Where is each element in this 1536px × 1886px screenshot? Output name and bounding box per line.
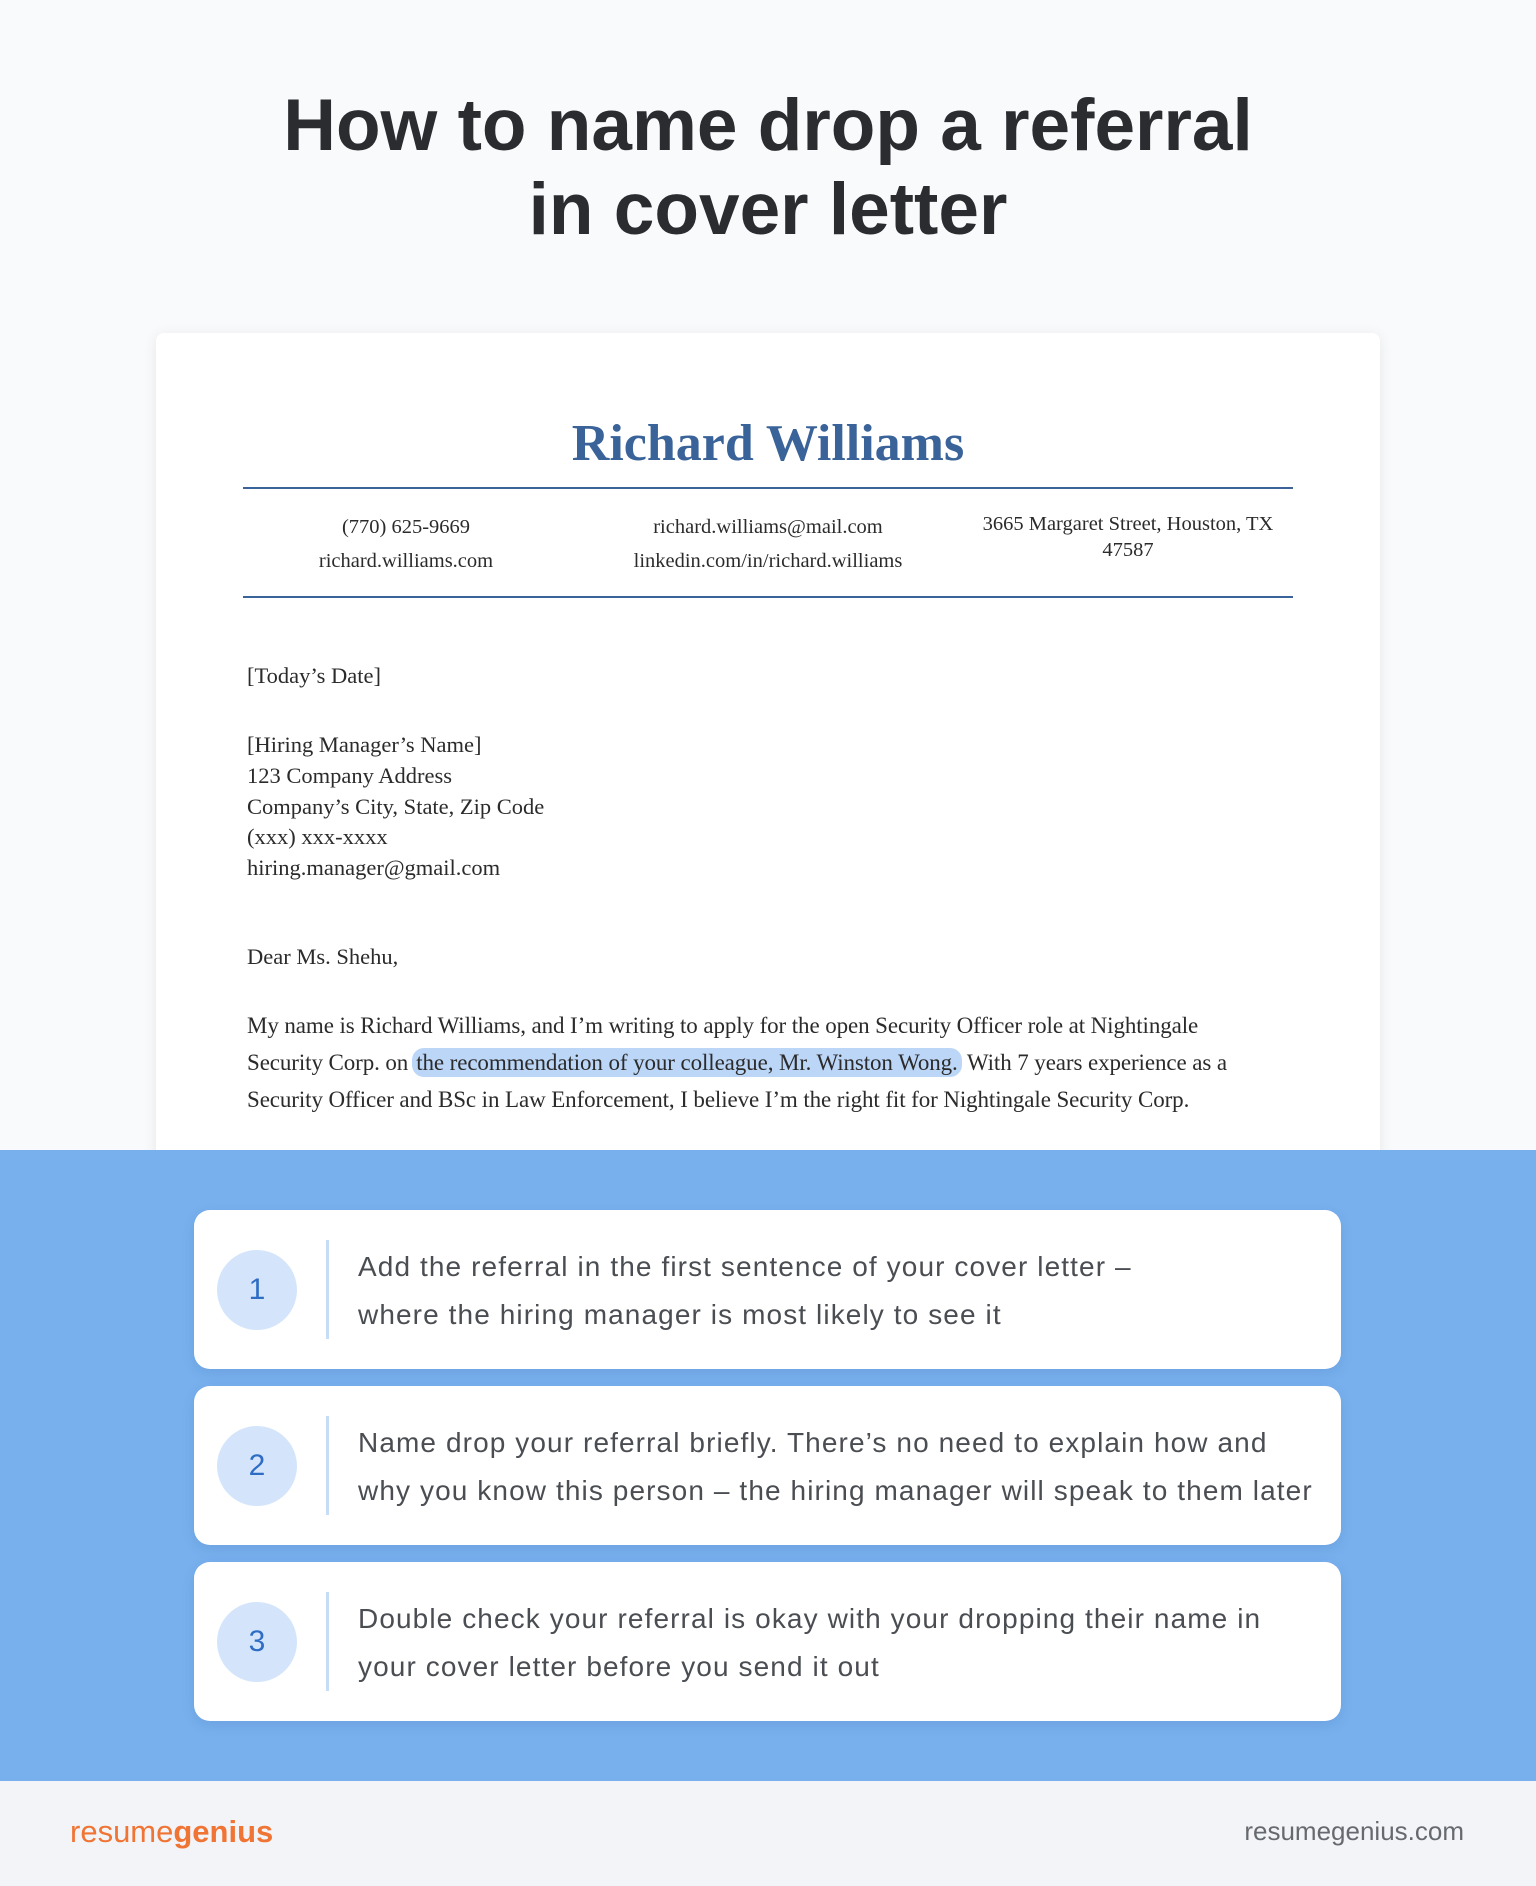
body paragraph: Security Corp. on the recommendation of your colleague, Mr. Winston Wong. With 7 years experience as a [247,1050,1227,1075]
number 1 [217,1250,297,1330]
step 2 text: why you know this person – the hiring manager will speak to them later [358,1475,1313,1506]
number 3 [217,1602,297,1682]
title: in cover letter [529,169,1007,250]
step 3 text: Double check your referral is okay with your dropping their name in [358,1603,1261,1634]
step 2 text [358,1427,1313,1506]
number 1: 1 [249,1273,265,1306]
recipient address: [Hiring Manager’s Name] [247,732,482,757]
recipient address: (xxx) xxx-xxxx [247,824,388,849]
number 2: 2 [249,1449,265,1482]
contact block: 47587 [1102,539,1154,561]
body paragraph: Security Officer and BSc in Law Enforcement, I believe I’m the right fit for Nightingale Security Corp. [247,1087,1189,1112]
number 3: 3 [249,1625,265,1658]
name heading: Richard Williams [572,415,964,472]
step 1 [194,1210,1341,1369]
body paragraph [247,1013,1227,1112]
contact block [243,487,1293,598]
title [283,85,1253,250]
step 3 text: your cover letter before you send it out [358,1651,880,1682]
recipient address: Company’s City, State, Zip Code [247,794,544,819]
title: How to name drop a referral [283,85,1253,166]
step 3 [194,1562,1341,1721]
salutation: Dear Ms. Shehu, [247,944,398,969]
contact block: linkedin.com/in/richard.williams [634,550,902,572]
date: [Today’s Date] [247,663,381,688]
logo: resumegenius [70,1814,273,1849]
number 2 [217,1426,297,1506]
footer [0,1781,1536,1886]
contact block: (770) 625-9669 [342,516,470,538]
recipient address [247,732,544,880]
step 1 text: where the hiring manager is most likely to see it [358,1299,1002,1330]
step 1 text [358,1251,1132,1330]
website: resumegenius.com [1244,1816,1464,1846]
step 3 text [358,1603,1261,1682]
step 2 [194,1386,1341,1545]
body paragraph: My name is Richard Williams, and I’m writing to apply for the open Security Officer role at Nightingale [247,1013,1198,1038]
contact block: richard.williams@mail.com [653,516,883,538]
step 1 text: Add the referral in the first sentence of your cover letter – [358,1251,1132,1282]
recipient address: 123 Company Address [247,763,452,788]
panel: cover letter card [156,333,1380,1173]
contact block: 3665 Margaret Street, Houston, TX [983,513,1273,535]
contact block: richard.williams.com [319,550,493,572]
blue band [0,1150,1536,1781]
step 2 text: Name drop your referral briefly. There’s no need to explain how and [358,1427,1268,1458]
recipient address: hiring.manager@gmail.com [247,855,500,880]
